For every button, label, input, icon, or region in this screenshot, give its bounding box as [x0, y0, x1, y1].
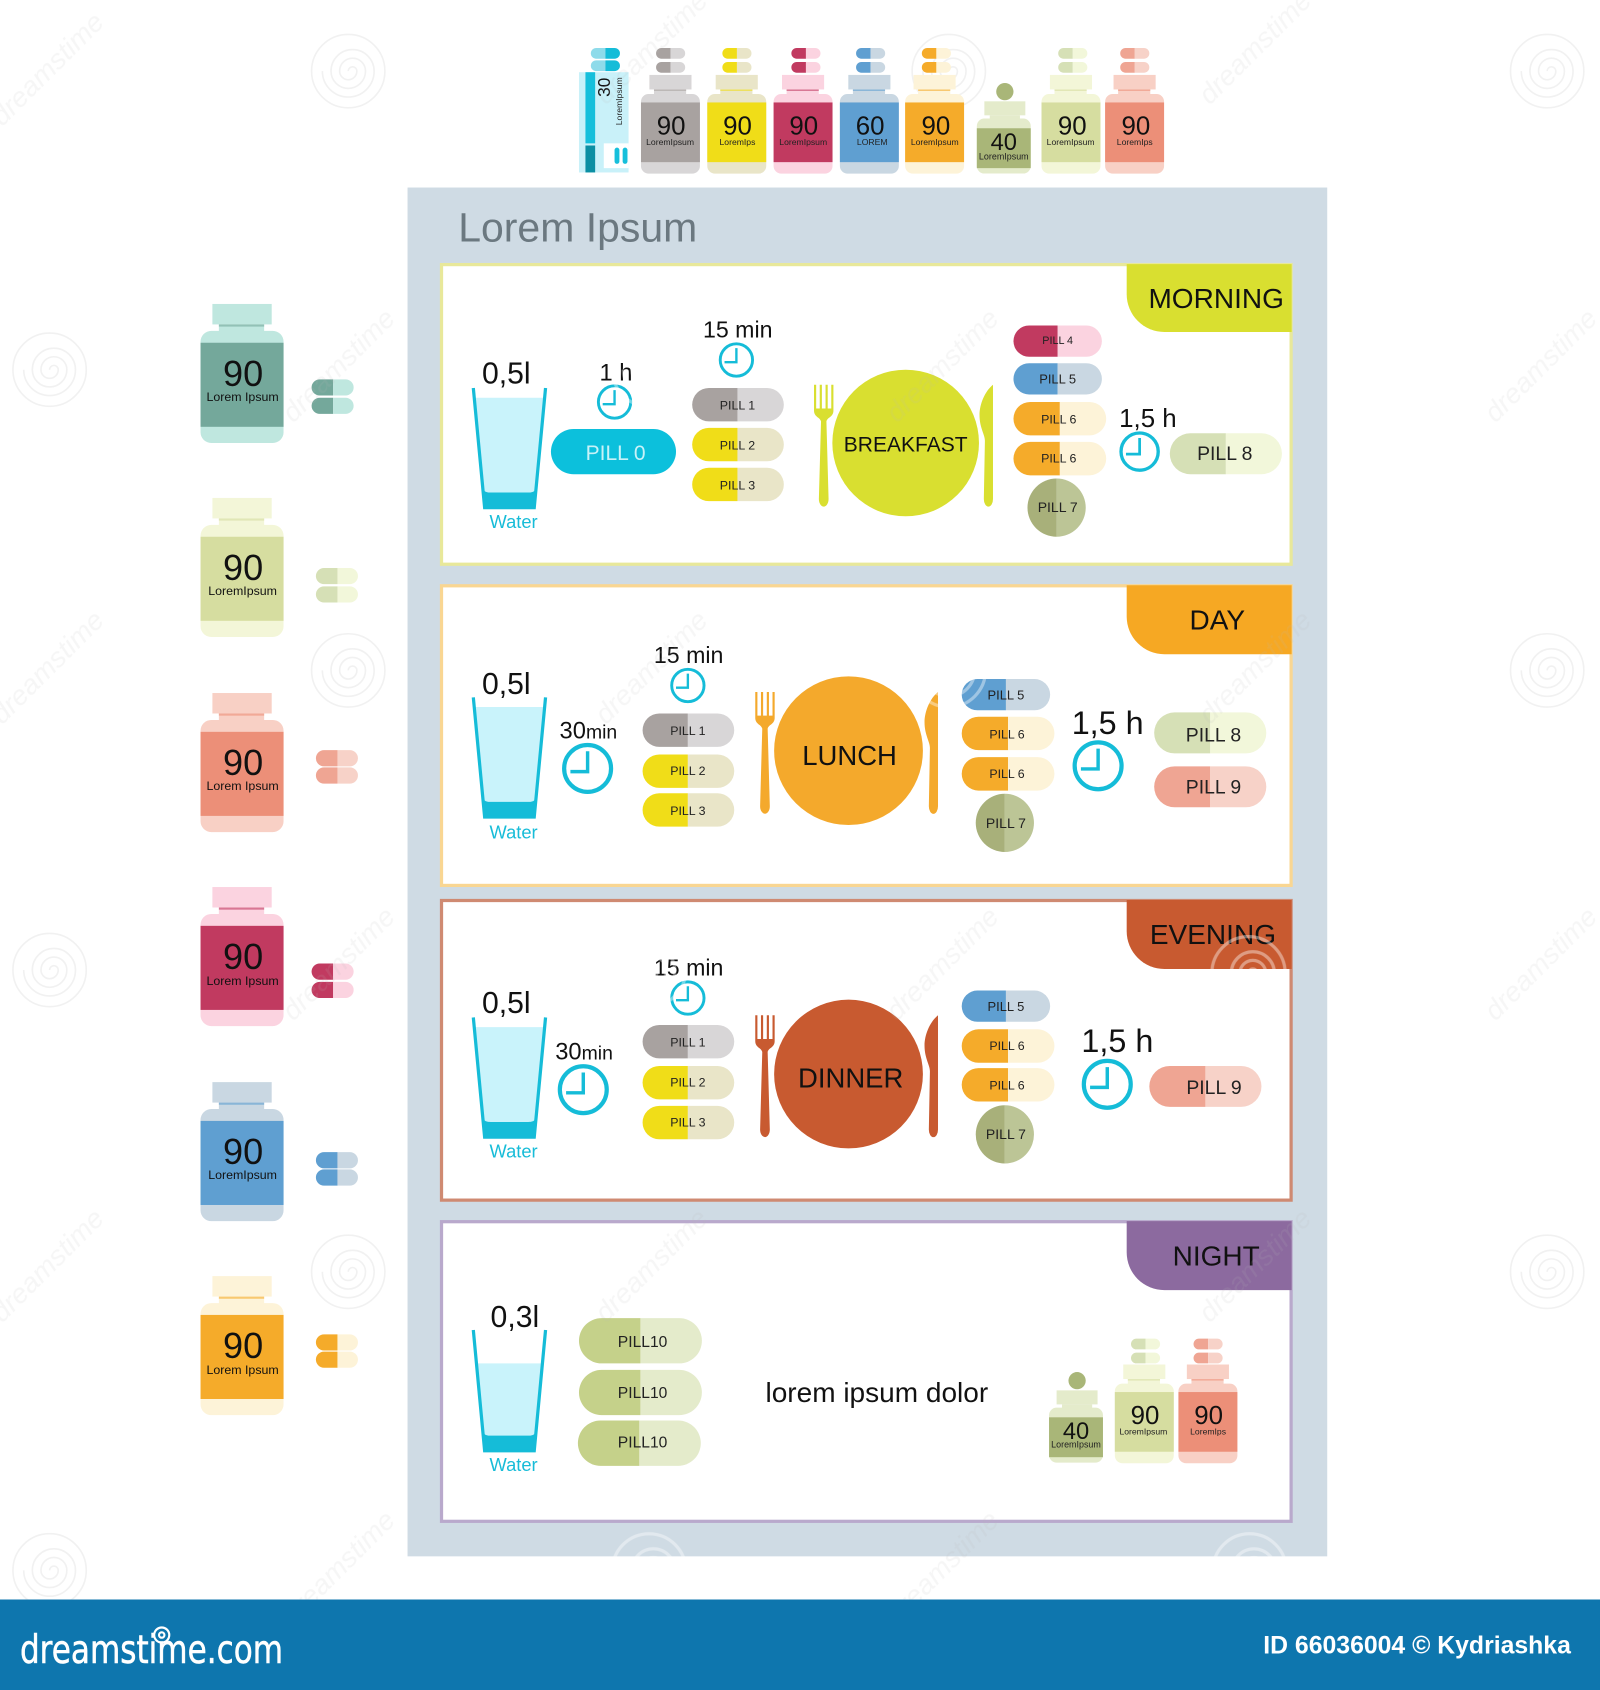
bottle: orange 90: LoremIpsum: [911, 137, 959, 147]
water glass: [473, 987, 546, 1162]
heading: Lorem Ipsum: Lorem Ipsum: [458, 204, 697, 250]
bottle: orange 90: [905, 48, 964, 174]
water glass: Water: [489, 1141, 538, 1162]
bottle: olive 40: [977, 83, 1031, 174]
timer: 1 h: 1 h: [599, 360, 632, 386]
bottle: salmon 90: LoremIps: [1117, 137, 1153, 147]
pills 10: PILL10: [618, 1434, 668, 1451]
bottle: olive 40: 40: [991, 130, 1017, 156]
timer: 1,5 h: [1119, 405, 1177, 470]
bottle: olive 40: LoremIpsum: [979, 152, 1029, 162]
water glass: 0,3l: 0,3l: [491, 1301, 539, 1334]
bottle: blue 60: 60: [856, 113, 884, 141]
pills 1 to 3: PILL 1: [720, 399, 755, 413]
bottle: salmon 90: 90: [1194, 1402, 1223, 1430]
bottle: yellow 90: LoremIps: [720, 137, 755, 147]
water glass: Water: [489, 822, 538, 843]
pills 5 to 7: PILL 7: [986, 815, 1026, 831]
watermark overlay: dreamstime: [588, 1202, 714, 1328]
timer: 15 min: [703, 316, 772, 376]
panel: evening: [442, 900, 1292, 1200]
pill 8: [1170, 433, 1282, 474]
watermark overlay: dreamstime: [1192, 604, 1317, 730]
pills 5 to 7: PILL 6: [989, 727, 1025, 741]
legend: pale green bottle: [201, 498, 358, 637]
bottle: crimson 90: 90: [789, 113, 818, 141]
timer: 1 h: [598, 360, 632, 418]
bottle: salmon 90: 90: [1121, 113, 1150, 141]
bottle: pale green 90: 90: [1131, 1402, 1159, 1430]
legend: blue bottle: [201, 1082, 358, 1221]
legend: teal bottle: Lorem Ipsum: [206, 390, 279, 404]
pills 4 to 7: PILL 6: [1041, 413, 1077, 427]
bottle: salmon 90: [1178, 1339, 1237, 1463]
plate: lunch: LUNCH: [802, 740, 897, 771]
pills 4 to 7: PILL 4: [1042, 335, 1073, 347]
timer: 30 min: [560, 718, 617, 792]
bottle: pale green 90: LoremIpsum: [1119, 1427, 1167, 1437]
legend: crimson bottle: Lorem Ipsum: [206, 974, 279, 988]
pills 1 to 3: PILL 1: [670, 1036, 706, 1050]
pills 1 to 3: PILL 3: [720, 478, 755, 492]
watermark overlay: dreamstime: [879, 901, 1005, 1026]
water glass: 0,5l: [482, 358, 531, 391]
tag: morning: [1127, 264, 1292, 332]
bottle: olive 40: LoremIpsum: [1051, 1439, 1101, 1449]
legend: crimson bottle: [201, 887, 354, 1026]
panel: morning: [442, 264, 1292, 564]
timer: 15 min: [654, 642, 723, 702]
panel: night: [442, 1221, 1292, 1521]
water glass: 0,3l: [473, 1301, 546, 1475]
tag: day: DAY: [1189, 604, 1245, 635]
bottle: pale green 90: LoremIpsum: [1047, 137, 1095, 147]
tag: night: [1127, 1221, 1292, 1290]
bottle: orange 90: 90: [921, 113, 950, 141]
plate: dinner: DINNER: [798, 1063, 903, 1094]
legend column: bottles with pills: [201, 304, 358, 1415]
timer: 1,5 h: [1072, 705, 1144, 789]
timer: 15 min: 15 min: [654, 642, 723, 668]
pills 1 to 3: PILL 2: [670, 764, 706, 778]
watermark overlay: dreamstime: [1478, 302, 1600, 428]
bottle: pale green 90: 90: [1058, 113, 1087, 141]
bottle: grey 90: [641, 48, 700, 174]
pills 5 to 7: PILL 5: [987, 999, 1024, 1014]
pills 5 to 7: [962, 679, 1054, 852]
timer: 1,5 h: 1,5 h: [1072, 705, 1144, 741]
plate: breakfast: [814, 370, 993, 516]
pills 1 to 3: PILL 2: [670, 1075, 706, 1089]
tag: day: [1127, 585, 1292, 654]
pills 5 to 7: PILL 7: [986, 1126, 1026, 1142]
water glass: [473, 358, 546, 532]
tag: night: NIGHT: [1173, 1240, 1260, 1271]
plate: lunch: [755, 676, 938, 825]
water glass: 0,5l: [482, 668, 531, 701]
legend: orange bottle: Lorem Ipsum: [206, 1363, 279, 1377]
pills 5 to 7: PILL 5: [987, 687, 1024, 702]
legend: salmon bottle: Lorem Ipsum: [206, 779, 279, 793]
bottle: pale green 90: [1042, 48, 1100, 174]
pills 5 to 7: PILL 6: [989, 1079, 1025, 1093]
legend: pale green bottle: 90: [223, 547, 263, 588]
pills 1 to 3: [643, 1025, 734, 1139]
footer bar: [0, 1599, 1600, 1690]
bottle: salmon 90: LoremIps: [1190, 1427, 1226, 1437]
bottle: crimson 90: [774, 48, 833, 174]
pills 4 to 7: PILL 6: [1041, 451, 1077, 465]
legend: orange bottle: [201, 1276, 358, 1415]
medicine box: pill 0: 30: [594, 78, 614, 97]
watermark overlay: dreamstime: [1478, 901, 1600, 1026]
timer: 30 min: 30min: [560, 718, 617, 744]
bottle: olive 40: 40: [1063, 1419, 1089, 1445]
timer: 1,5 h: 1,5 h: [1081, 1023, 1153, 1059]
pills 10: [578, 1318, 702, 1466]
plate: dinner: [755, 1000, 938, 1148]
row of medicine bottles: [579, 48, 1164, 174]
bottle: grey 90: LoremIpsum: [646, 137, 694, 147]
pills 4 to 7: PILL 5: [1039, 372, 1076, 387]
legend: salmon bottle: [201, 693, 358, 832]
pill 0: PILL 0: [586, 442, 646, 465]
legend: orange bottle: 90: [223, 1325, 263, 1366]
footer logo: dreamstime.com: dreamstime.com: [20, 1628, 283, 1673]
pills 8 and 9: PILL 9: [1186, 776, 1241, 798]
legend: blue bottle: 90: [223, 1131, 263, 1172]
bottle: grey 90: 90: [657, 113, 686, 141]
text: lorem ipsum dolor: lorem ipsum dolor: [765, 1377, 988, 1408]
water glass: Water: [489, 511, 538, 532]
pills 8 and 9: PILL 8: [1186, 725, 1241, 747]
pill 9: PILL 9: [1186, 1077, 1242, 1099]
watermark overlay: dreamstime: [276, 302, 401, 428]
pills 1 to 3: [643, 714, 734, 827]
pills 4 to 7: PILL 7: [1038, 499, 1078, 515]
pill 0: [551, 429, 676, 474]
pill 8: PILL 8: [1197, 443, 1252, 465]
tag: evening: [1127, 900, 1292, 969]
bottle: salmon 90: [1105, 48, 1164, 174]
timer: 15 min: 15 min: [654, 954, 723, 980]
bottle: yellow 90: 90: [723, 113, 752, 141]
pills 10: PILL10: [618, 1385, 668, 1402]
watermark overlay: dreamstime: [588, 604, 714, 730]
timer: 1,5 h: [1081, 1023, 1153, 1108]
pills 1 to 3: PILL 3: [670, 804, 706, 818]
watermark overlay: dreamstime: [276, 901, 401, 1026]
pills 5 to 7: PILL 6: [989, 1039, 1025, 1053]
legend: teal bottle: 90: [223, 353, 263, 394]
timer: 1,5 h: 1,5 h: [1119, 405, 1177, 433]
watermark overlay: dreamstime: [276, 1504, 401, 1630]
pills 5 to 7: PILL 6: [989, 767, 1025, 781]
watermark overlay: dreamstime: [879, 302, 1005, 428]
panel: day: [442, 585, 1292, 885]
timer: 30 min: [555, 1039, 613, 1113]
panel: schedule background: [408, 188, 1327, 1556]
pills 1 to 3: PILL 1: [670, 724, 706, 738]
pills 8 and 9: [1154, 712, 1266, 807]
bottle: blue 60: LOREM: [857, 137, 888, 147]
footer credit: ID 66036004 © Kydriashka: [1263, 1632, 1571, 1659]
pills 4 to 7: [1013, 325, 1106, 537]
legend: salmon bottle: 90: [223, 742, 263, 783]
tag: morning: MORNING: [1148, 283, 1284, 314]
timer: 15 min: [654, 954, 723, 1014]
watermark overlay: dreamstime: [879, 1504, 1005, 1630]
pill 9: [1149, 1066, 1261, 1107]
legend: crimson bottle: 90: [223, 936, 263, 977]
water glass: 0,5l: [482, 987, 531, 1020]
water glass: [473, 668, 546, 843]
bottle: blue 60: [840, 48, 899, 174]
pills 5 to 7: [962, 991, 1054, 1163]
legend: teal bottle: [201, 304, 354, 443]
bottle: pale green 90: [1115, 1339, 1174, 1463]
tag: evening: EVENING: [1150, 919, 1276, 950]
timer: 15 min: 15 min: [703, 316, 772, 342]
water glass: 0,3l: Water: [489, 1454, 538, 1475]
pills 10: PILL10: [618, 1334, 668, 1351]
legend: blue bottle: LoremIpsum: [208, 1168, 277, 1182]
legend: pale green bottle: LoremIpsum: [208, 584, 277, 598]
medicine box: pill 0: LoremIpsum: [614, 77, 624, 125]
timer: 30 min: 30min: [555, 1039, 613, 1065]
bottle: olive 40: [1049, 1372, 1103, 1463]
plate: breakfast: BREAKFAST: [844, 434, 968, 457]
medicine box: pill 0: [579, 48, 629, 172]
watermark overlay: dreamstime: [1192, 1202, 1317, 1328]
pills 1 to 3: [692, 388, 784, 501]
bottle: yellow 90: [707, 48, 766, 174]
bottle: crimson 90: LoremIpsum: [779, 137, 827, 147]
pills 1 to 3: PILL 2: [720, 438, 755, 452]
pills 1 to 3: PILL 3: [670, 1115, 706, 1129]
